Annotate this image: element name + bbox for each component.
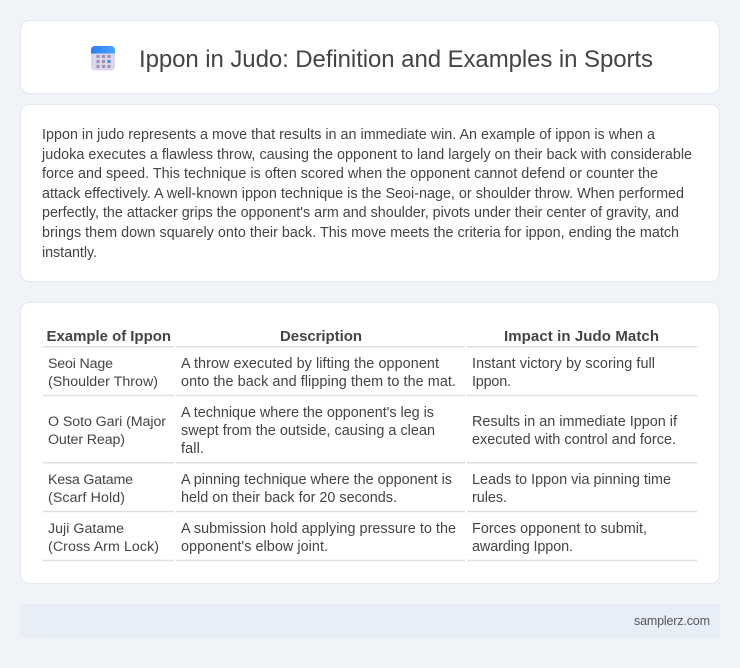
row: Juji Gatame xyxy=(48,521,647,555)
intro paragraph text: instantly. xyxy=(42,245,97,261)
intro paragraph text xyxy=(41,127,692,261)
footer text: samplerz.com xyxy=(634,614,710,628)
title: Ippon in Judo: Definition and Examples in Sports xyxy=(139,46,653,73)
row: Kesa Gatame: Leads to Ippon via pinning time xyxy=(472,472,671,488)
row: Kesa Gatame: Kesa Gatame xyxy=(48,472,133,488)
table panel xyxy=(20,302,720,584)
row: O Soto Gari xyxy=(48,405,678,457)
row: Kesa Gatame: A pinning technique where the opponent is xyxy=(181,472,452,488)
row: Kesa Gatame xyxy=(48,472,671,506)
row: Seoi Nage xyxy=(48,356,655,390)
row: Kesa Gatame: rules. xyxy=(472,490,507,506)
row: Juji Gatame: (Cross Arm Lock) xyxy=(48,539,159,555)
intro paragraph text: Ippon in judo represents a move that results in an immediate win. An example of ippon is when a xyxy=(42,127,655,143)
row: Kesa Gatame: held on their back for 20 seconds. xyxy=(181,490,397,506)
row: Seoi Nage: Ippon. xyxy=(472,374,511,390)
header card xyxy=(20,20,720,94)
row: Kesa Gatame: (Scarf Hold) xyxy=(48,490,125,506)
row: O Soto Gari: executed with control and force. xyxy=(472,432,676,448)
table header xyxy=(46,328,659,345)
footer bar xyxy=(20,604,720,638)
row: Juji Gatame: opponent's elbow joint. xyxy=(181,539,328,555)
row: O Soto Gari: Results in an immediate Ippon if xyxy=(472,414,678,430)
row: O Soto Gari: O Soto Gari (Major xyxy=(48,414,166,430)
row: O Soto Gari: A technique where the opponent's leg is xyxy=(181,405,434,421)
row: Seoi Nage: Seoi Nage xyxy=(48,356,113,372)
intro paragraph text: force and speed. This technique is often scored when the opponent cannot defend or counter the xyxy=(42,166,658,182)
row: Juji Gatame: awarding Ippon. xyxy=(472,539,573,555)
intro paragraph text: perfectly, the attacker grips the opponent's arm and shoulder, pivots under their center of gravity, and xyxy=(42,205,679,221)
table header: Impact in Judo Match xyxy=(504,328,659,345)
row: O Soto Gari: Outer Reap) xyxy=(48,432,125,448)
intro paragraph text: brings them down squarely onto their back. This move meets the criteria for ippon, ending the match xyxy=(42,225,679,241)
row: Seoi Nage: Instant victory by scoring full xyxy=(472,356,655,372)
icon: calendar xyxy=(91,46,115,70)
row: O Soto Gari: swept from the outside, causing a clean xyxy=(181,423,435,439)
table header: Description xyxy=(280,328,362,345)
row: Seoi Nage: onto the back and flipping them to the mat. xyxy=(181,374,456,390)
intro paragraph card xyxy=(20,104,720,282)
intro paragraph text: attack effectively. A well-known ippon technique is the Seoi-nage, or shoulder throw. When performed xyxy=(42,186,684,202)
row: Juji Gatame: Forces opponent to submit, xyxy=(472,521,647,537)
row: Juji Gatame: A submission hold applying pressure to the xyxy=(181,521,456,537)
row: Seoi Nage: A throw executed by lifting the opponent xyxy=(181,356,439,372)
row: O Soto Gari: fall. xyxy=(181,441,204,457)
table header: Example of Ippon xyxy=(46,328,171,345)
row: Juji Gatame: Juji Gatame xyxy=(48,521,124,537)
intro paragraph text: judoka executes a flawless throw, causing the opponent to land largely on their back with considerable xyxy=(41,147,692,163)
row: Seoi Nage: (Shoulder Throw) xyxy=(48,374,158,390)
